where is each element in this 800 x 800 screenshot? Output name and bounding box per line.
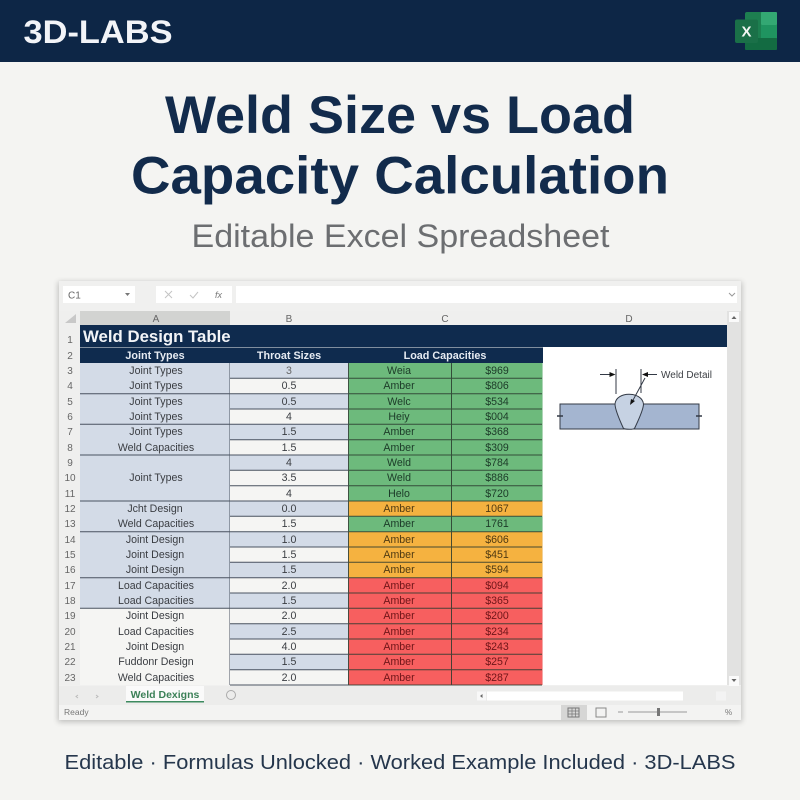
- column B: throat sizes: 3: [286, 365, 292, 377]
- column B: throat sizes: 2.0: [282, 610, 296, 622]
- row number gutter: [59, 325, 80, 685]
- active sheet tab: Weld Dexigns: [131, 689, 199, 701]
- row number gutter: 5: [67, 397, 73, 408]
- column C: load capacities, status-coloured: $594: [485, 564, 509, 576]
- row number gutter: 7: [67, 427, 73, 438]
- row number gutter: 17: [64, 581, 76, 592]
- column A: joint types: Fuddonr Design: [118, 656, 194, 668]
- column B: throat sizes: 1.5: [282, 442, 296, 454]
- column C: load capacities, status-coloured: $004: [485, 411, 509, 423]
- column C: load capacities, status-coloured: Amber: [383, 534, 415, 546]
- panel: column D weld detail diagram: [543, 347, 727, 685]
- subtitle: Editable Excel Spreadsheet: [192, 218, 610, 254]
- column C: load capacities, status-coloured: Amber: [383, 503, 415, 515]
- column B: throat sizes: 1.5: [282, 518, 296, 530]
- column B: throat sizes: [230, 363, 348, 685]
- row number gutter: 3: [67, 366, 73, 377]
- vertical scrollbar: [727, 311, 741, 686]
- row number gutter: 12: [64, 504, 76, 515]
- column C: load capacities, status-coloured: $287: [485, 672, 509, 684]
- diagram label: Weld Detail: [661, 370, 712, 381]
- column C: load capacities, status-coloured: Amber: [383, 564, 415, 576]
- row number gutter: 6: [67, 412, 73, 423]
- column B: throat sizes: 0.5: [282, 396, 296, 408]
- column C: load capacities, status-coloured: Welc: [387, 396, 411, 408]
- row number gutter: 11: [65, 489, 76, 500]
- column C: load capacities, status-coloured: $534: [485, 396, 509, 408]
- row number gutter: 4: [67, 381, 73, 392]
- table header row: Throat Sizes: [257, 350, 321, 362]
- icon: weld cross-section: [557, 369, 702, 429]
- formula bar: fx: [215, 290, 223, 300]
- icon: Excel logo: X: [741, 24, 752, 40]
- row number gutter: 10: [64, 473, 76, 484]
- column C: load capacities, status-coloured: Weia: [387, 365, 411, 377]
- row number gutter: 8: [67, 443, 73, 454]
- column B: throat sizes: 1.5: [282, 549, 296, 561]
- brand name: 3D-LABS: [24, 14, 172, 50]
- row number gutter: 23: [64, 673, 76, 684]
- column C: load capacities, status-coloured: $784: [485, 457, 509, 469]
- status bar: Ready: [64, 707, 89, 717]
- column C: load capacities, status-coloured: $806: [485, 380, 509, 392]
- column A: joint types: Joint Types: [129, 426, 183, 438]
- column C: load capacities, status-coloured: Amber: [383, 518, 415, 530]
- title: [131, 86, 669, 206]
- status bar: [59, 705, 741, 720]
- title: Weld Size vs Load: [165, 86, 635, 145]
- row number gutter: 16: [64, 565, 76, 576]
- column headers: D: [625, 314, 633, 325]
- row number gutter: 2: [67, 351, 73, 362]
- status bar: %: [725, 708, 732, 717]
- footer tagline: Editable · Formulas Unlocked · Worked Example Included · 3D-LABS: [64, 752, 735, 774]
- icon: Excel logo: [735, 12, 777, 50]
- column C: load capacities, status-coloured: Weld: [387, 472, 411, 484]
- column A: joint types: Joint Types: [129, 472, 183, 484]
- column B: throat sizes: 4.0: [282, 641, 296, 653]
- column C: load capacities, status-coloured: $606: [485, 534, 509, 546]
- row number gutter: 22: [64, 657, 76, 668]
- column B: throat sizes: 4: [286, 411, 292, 423]
- column A: joint types: Weld Capacities: [118, 672, 194, 684]
- column A: joint types: Joint Types: [129, 365, 183, 377]
- formula bar: [63, 286, 737, 303]
- table header row: Load Capacities: [404, 350, 486, 362]
- column A: joint types: Joint Design: [126, 549, 184, 561]
- row number gutter: 1: [67, 335, 73, 346]
- column C: load capacities, status-coloured: $243: [485, 641, 509, 653]
- column B: throat sizes: 4: [286, 488, 292, 500]
- column A: joint types: Weld Capacities: [118, 518, 194, 530]
- column C: load capacities, status-coloured: $200: [485, 610, 509, 622]
- column A: joint types: Weld Capacities: [118, 442, 194, 454]
- column A: joint types: Joint Types: [129, 396, 183, 408]
- panel: spreadsheet window: [58, 281, 742, 722]
- column C: load capacities, status-coloured: Weld: [387, 457, 411, 469]
- header bar: [0, 0, 800, 62]
- column headers: B: [286, 314, 293, 325]
- column A: joint types: Jcht Design: [127, 503, 183, 515]
- column headers: [59, 311, 727, 325]
- column C: load capacities, status-coloured: Amber: [383, 641, 415, 653]
- table header row: [80, 348, 543, 363]
- column C: load capacities, status-coloured: Amber: [383, 595, 415, 607]
- column C: load capacities, status-coloured: $451: [485, 549, 509, 561]
- title: Capacity Calculation: [131, 146, 669, 206]
- column C: load capacities, status-coloured: [348, 363, 542, 685]
- column A: joint types: Load Capacities: [118, 595, 194, 607]
- column A: joint types: Joint Design: [126, 564, 184, 576]
- column B: throat sizes: 3.5: [282, 472, 296, 484]
- column C: load capacities, status-coloured: Amber: [383, 549, 415, 561]
- column C: load capacities, status-coloured: $094: [485, 580, 509, 592]
- column C: load capacities, status-coloured: $309: [485, 442, 509, 454]
- column C: load capacities, status-coloured: $365: [485, 595, 509, 607]
- column B: throat sizes: 1.5: [282, 595, 296, 607]
- column B: throat sizes: 2.0: [282, 580, 296, 592]
- formula bar: C1: [68, 290, 81, 302]
- row number gutter: 9: [67, 458, 73, 469]
- column C: load capacities, status-coloured: Heiy: [388, 411, 410, 423]
- column A: joint types: Load Capacities: [118, 580, 194, 592]
- active sheet tab: [126, 686, 204, 702]
- column B: throat sizes: 2.0: [282, 672, 296, 684]
- column headers: A: [153, 314, 160, 325]
- row number gutter: 20: [64, 627, 76, 638]
- column A: joint types: Joint Types: [129, 411, 183, 423]
- column C: load capacities, status-coloured: 1067: [485, 503, 509, 515]
- column A: joint types: Joint Design: [126, 534, 184, 546]
- column B: throat sizes: 1.5: [282, 656, 296, 668]
- column C: load capacities, status-coloured: Amber: [383, 626, 415, 638]
- column B: throat sizes: 4: [286, 457, 292, 469]
- column C: load capacities, status-coloured: $257: [485, 656, 509, 668]
- column A: joint types: Joint Types: [129, 380, 183, 392]
- column C: load capacities, status-coloured: Helo: [388, 488, 410, 500]
- column B: throat sizes: 1.5: [282, 564, 296, 576]
- table header row: Joint Types: [125, 350, 185, 362]
- column C: load capacities, status-coloured: Amber: [383, 380, 415, 392]
- column C: load capacities, status-coloured: $368: [485, 426, 509, 438]
- column C: load capacities, status-coloured: Amber: [383, 580, 415, 592]
- table title row: Weld Design Table: [83, 327, 231, 346]
- row number gutter: 21: [64, 642, 76, 653]
- column A: joint types: Load Capacities: [118, 626, 194, 638]
- column C: load capacities, status-coloured: $720: [485, 488, 509, 500]
- column C: load capacities, status-coloured: Amber: [383, 656, 415, 668]
- column C: load capacities, status-coloured: $886: [485, 472, 509, 484]
- column C: load capacities, status-coloured: $234: [485, 626, 509, 638]
- column B: throat sizes: 1.0: [282, 534, 296, 546]
- column A: joint types: Joint Design: [126, 641, 184, 653]
- column B: throat sizes: 0.0: [282, 503, 296, 515]
- sheet tab bar: [59, 686, 741, 705]
- row number gutter: 18: [64, 596, 76, 607]
- column C: load capacities, status-coloured: Amber: [383, 442, 415, 454]
- column C: load capacities, status-coloured: Amber: [383, 426, 415, 438]
- column C: load capacities, status-coloured: 1761: [485, 518, 509, 530]
- column A: joint types: Joint Design: [126, 610, 184, 622]
- column A: joint types: [80, 363, 230, 685]
- column headers: C: [441, 314, 449, 325]
- row number gutter: 15: [64, 550, 76, 561]
- row number gutter: 19: [64, 611, 76, 622]
- column B: throat sizes: 2.5: [282, 626, 296, 638]
- row number gutter: 14: [64, 535, 76, 546]
- horizontal scrollbar: [477, 692, 726, 700]
- column C: load capacities, status-coloured: Amber: [383, 610, 415, 622]
- column B: throat sizes: 0.5: [282, 380, 296, 392]
- table title row: [80, 325, 727, 347]
- column B: throat sizes: 1.5: [282, 426, 296, 438]
- column C: load capacities, status-coloured: Amber: [383, 672, 415, 684]
- column C: load capacities, status-coloured: $969: [485, 365, 509, 377]
- row number gutter: 13: [64, 519, 76, 530]
